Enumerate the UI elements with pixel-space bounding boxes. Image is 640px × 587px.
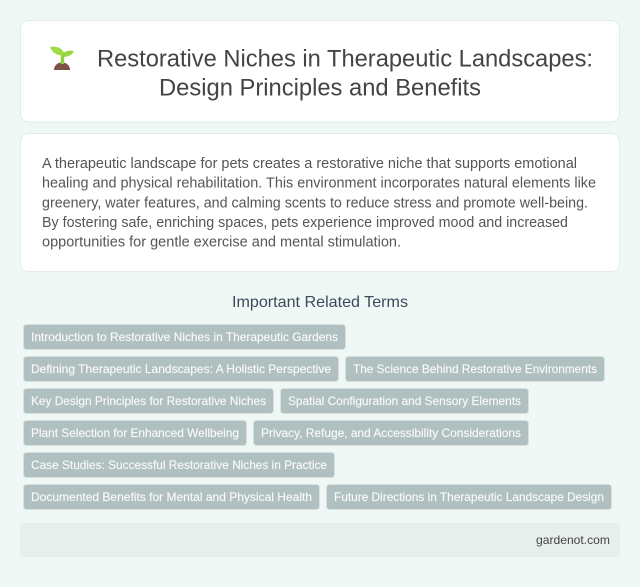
panel: description card [20,134,620,272]
text block: description: By fostering safe, enriching spaces, pets experience improved mood and increased [42,214,568,231]
text block: description: greenery, water features, and calming scents to reduce stress and promote well-being. [42,194,588,212]
tag: defining landscapes [24,356,338,382]
tag: introduction [24,324,346,350]
tag: introduction: Introduction to Restorative Niches in Therapeutic Gardens [31,330,338,344]
tag list: related terms [24,324,612,510]
tag: documented benefits: Documented Benefits for Mental and Physical Health [31,490,312,504]
footer [20,523,620,557]
tag: science [346,356,604,382]
tag: key design principles [24,388,274,414]
tag: spatial configuration: Spatial Configuration and Sensory Elements [288,394,521,408]
tag: key design principles: Key Design Principles for Restorative Niches [31,394,266,408]
tag: defining landscapes: Defining Therapeutic Landscapes: A Holistic Perspective [31,362,331,376]
heading: important related terms: Important Related Terms [232,294,408,311]
heading: title: Design Principles and Benefits [159,74,481,102]
tag: spatial configuration [280,388,528,414]
tag: plant selection: Plant Selection for Enhanced Wellbeing [31,426,239,440]
tag: documented benefits [24,484,320,510]
heading: title: Restorative Niches in Therapeutic Landscapes: [97,46,593,72]
text block: description [42,155,596,250]
tag: science: The Science Behind Restorative Environments [353,362,597,376]
panel: title card [20,20,620,122]
icon: sprout [50,47,74,70]
heading: title [97,46,593,102]
tag: future directions [326,484,612,510]
text block: description: opportunities for gentle exercise and mental stimulation. [42,234,401,250]
tag: privacy: Privacy, Refuge, and Accessibility Considerations [261,426,521,440]
tag: privacy [254,420,528,446]
tag: case studies: Case Studies: Successful Restorative Niches in Practice [31,458,327,472]
tag: future directions: Future Directions in Therapeutic Landscape Design [334,490,604,504]
tag: plant selection [24,420,246,446]
text block: description: A therapeutic landscape for pets creates a restorative niche that supports emotional [42,155,577,172]
text block: description: healing and physical rehabilitation. This environment incorporates natural elements like [42,174,596,192]
tag: case studies [24,452,334,478]
footer: gardenot.com [536,533,610,547]
